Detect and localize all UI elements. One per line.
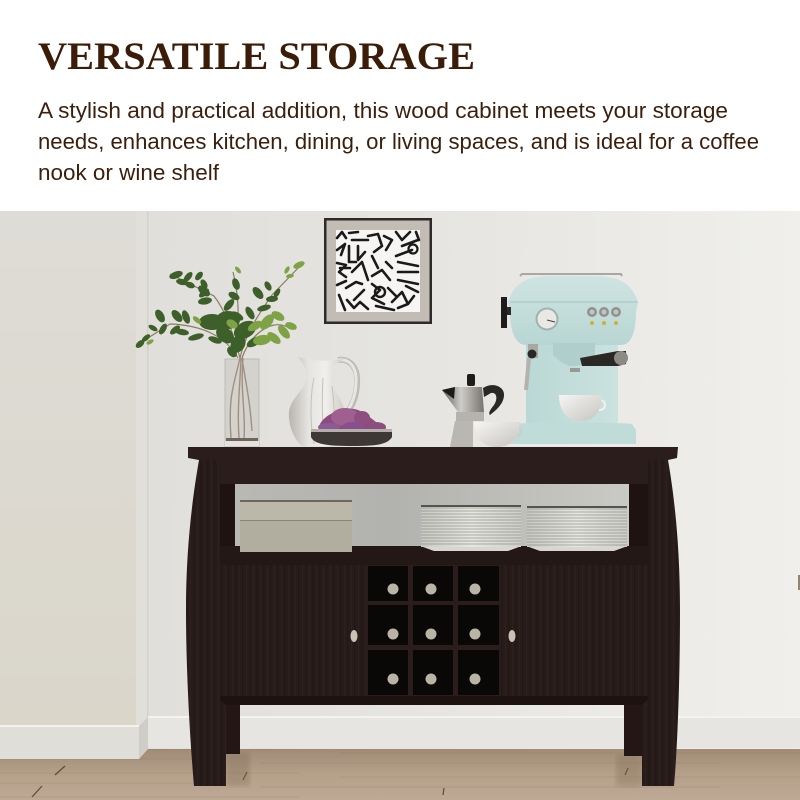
- left leg: [186, 460, 226, 786]
- cup on machine: [559, 395, 605, 421]
- room scene background: [0, 211, 800, 800]
- column: [526, 335, 618, 430]
- wine bottle tops: [388, 584, 480, 684]
- plant in glass vase: [134, 260, 306, 446]
- cabinet top: [188, 447, 678, 460]
- buttons: [587, 307, 621, 325]
- gauge: [536, 308, 558, 330]
- baseboard: [0, 716, 800, 759]
- plate stacks: [421, 505, 627, 551]
- description text: [38, 98, 759, 185]
- bowl of purple fruit: [311, 408, 392, 446]
- vase: [225, 358, 259, 446]
- white coffee cup: [474, 422, 521, 447]
- steam wand: [526, 344, 538, 390]
- head: [508, 276, 638, 345]
- description text: nook or wine shelf: [38, 160, 220, 185]
- doors: [220, 565, 648, 705]
- white pitcher: [289, 357, 357, 446]
- group head and handle: [553, 343, 628, 372]
- description text: A stylish and practical addition, this wood cabinet meets your storage: [38, 98, 728, 123]
- title: VERSATILE STORAGE: [38, 35, 475, 78]
- base: [510, 422, 636, 444]
- open shelf back shadow: [235, 484, 629, 546]
- door knobs: [350, 630, 516, 642]
- espresso machine: [501, 274, 638, 446]
- right leg: [642, 460, 680, 786]
- moka pot: [442, 374, 504, 447]
- description text: needs, enhances kitchen, dining, or living spaces, and is ideal for a coffee: [38, 129, 759, 154]
- top rail: [520, 274, 622, 276]
- shelf: [220, 546, 648, 565]
- back legs: [224, 700, 643, 756]
- wine rack: [367, 565, 500, 696]
- left knob: [501, 297, 507, 328]
- cabinet: [186, 447, 680, 786]
- framed art: [324, 218, 432, 324]
- storage box: [240, 500, 352, 552]
- cabinet frame: [220, 460, 648, 484]
- wood floor: [0, 749, 800, 800]
